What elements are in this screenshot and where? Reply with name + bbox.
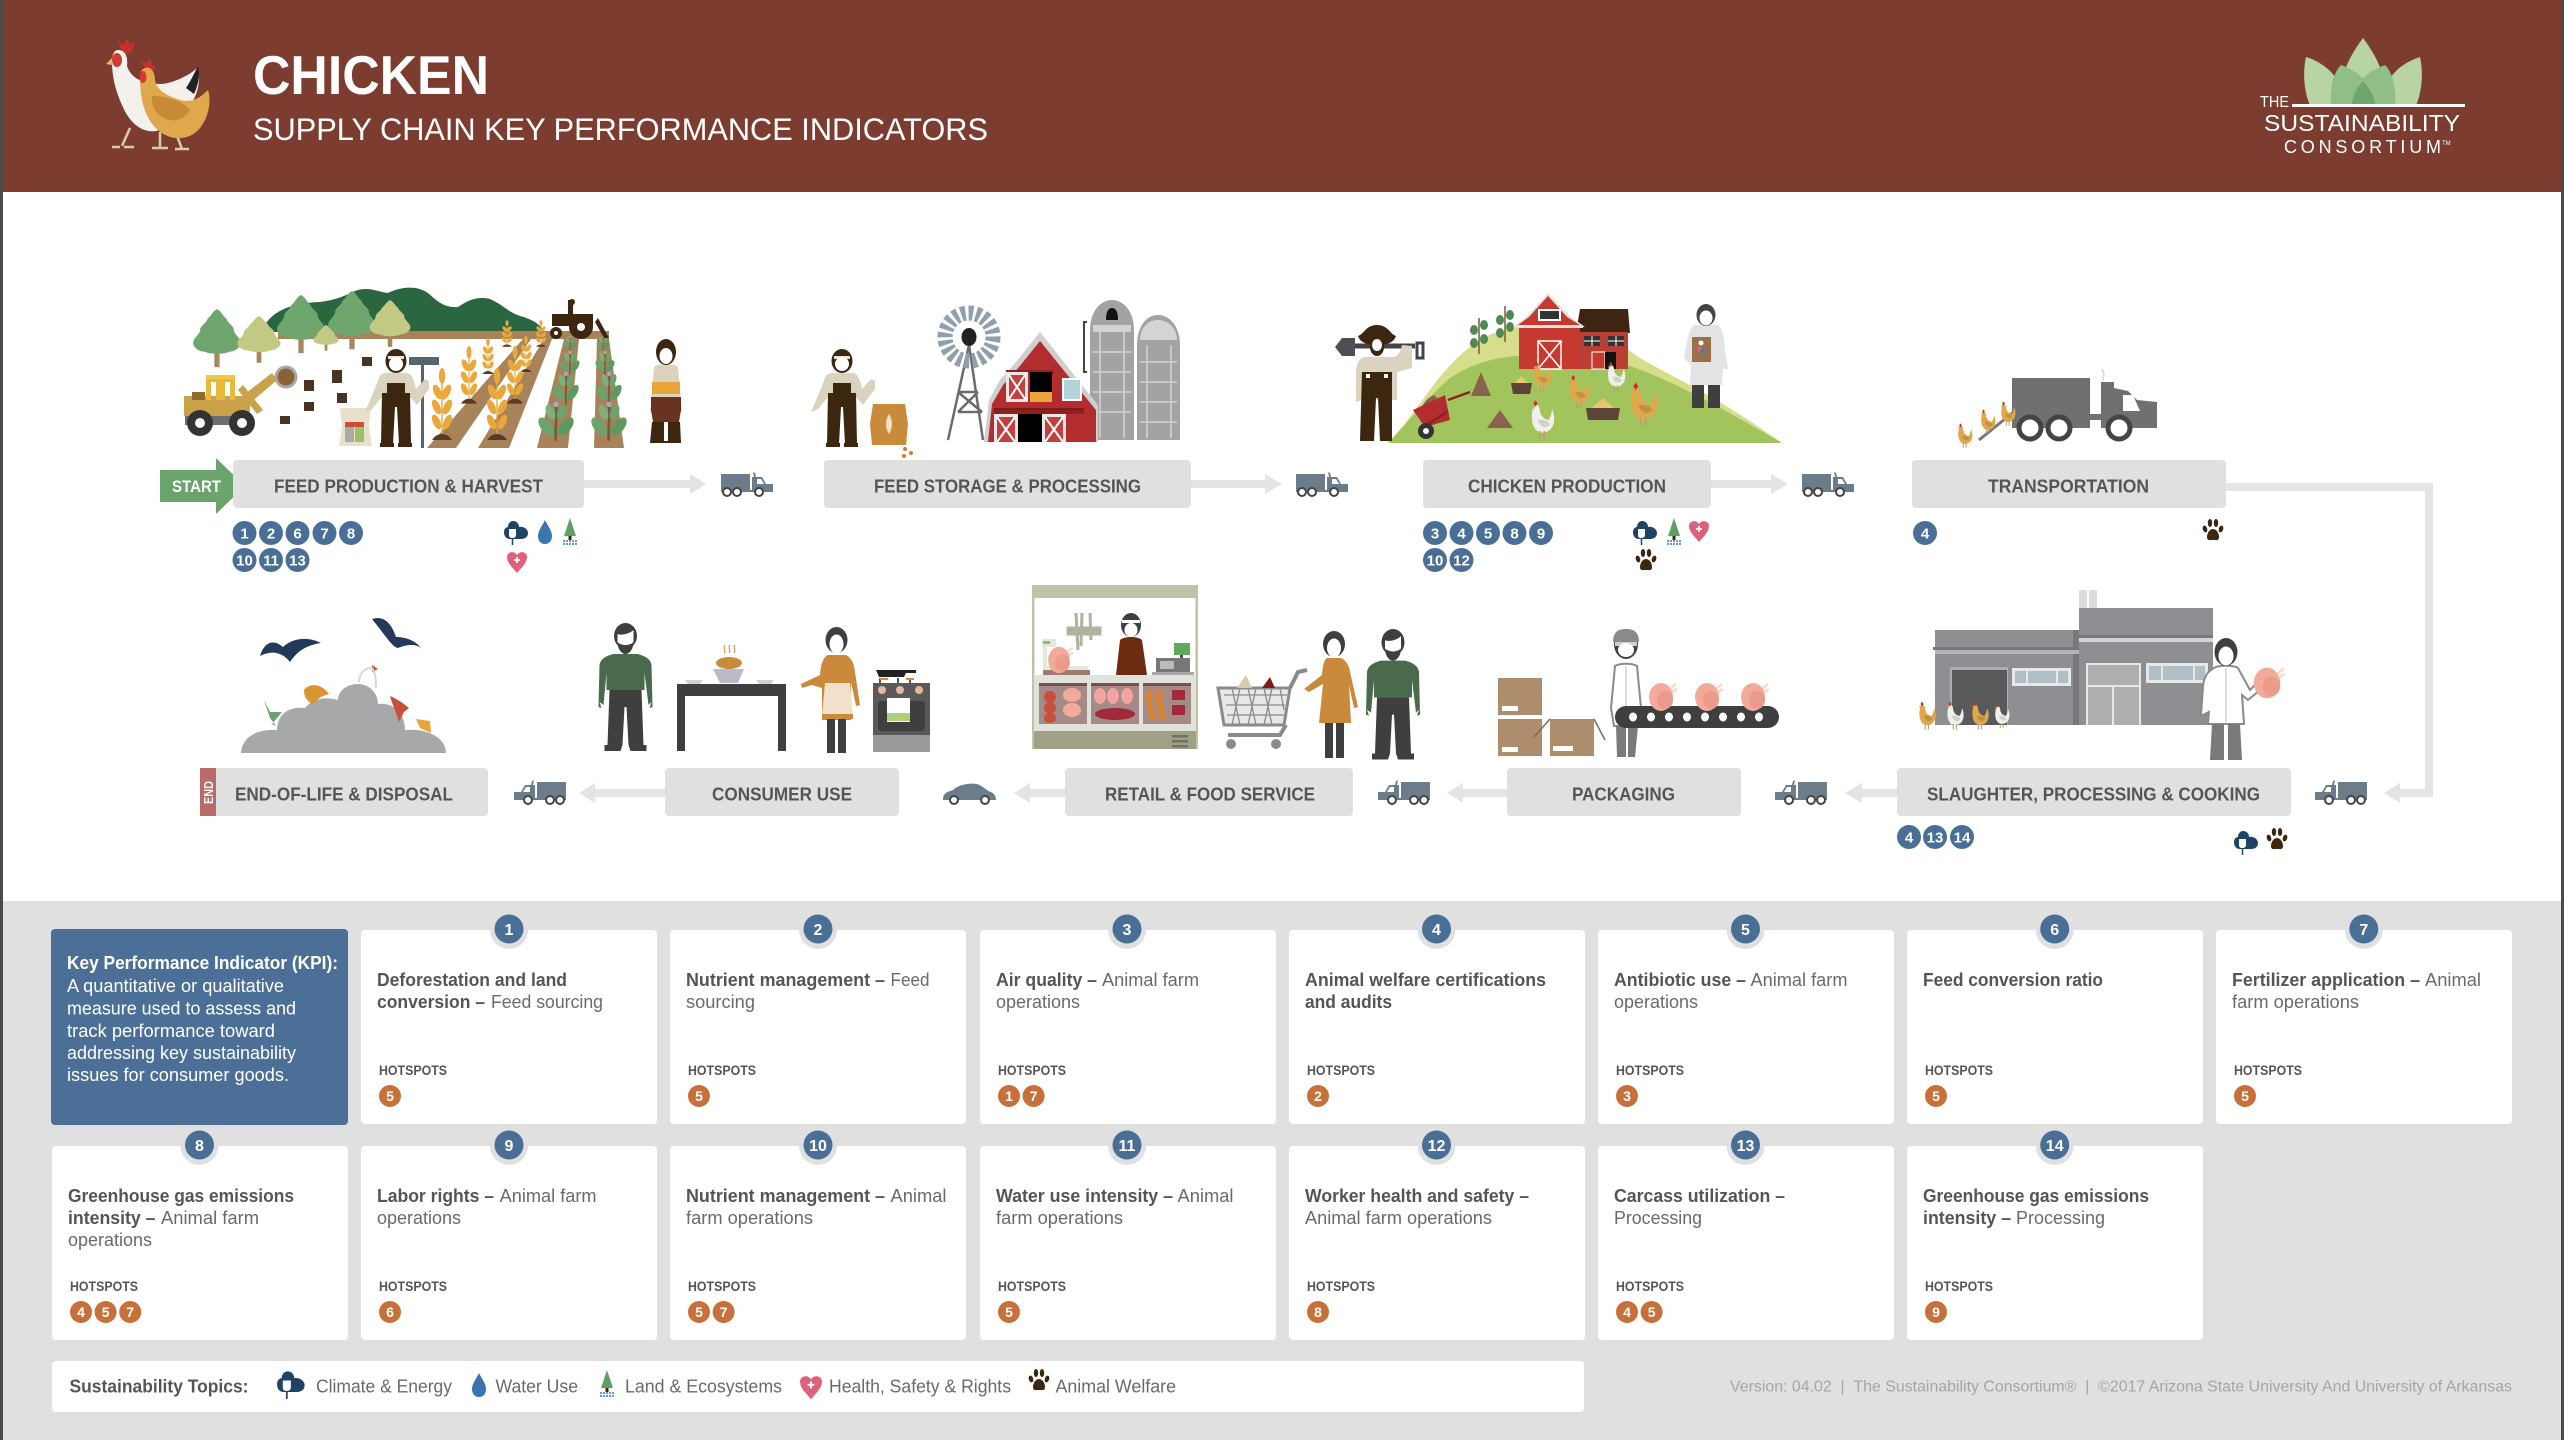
KPI card 5: Antibiotic use –: [1614, 970, 1746, 990]
KPI card 4: 2: [1314, 1088, 1322, 1104]
start arrow: START: [172, 477, 222, 496]
KPI card 13: HOTSPOTS: [1616, 1279, 1684, 1294]
KPI card 6: [1907, 911, 2203, 1124]
KPI badges and topics: slaughter: 4: [1905, 830, 1914, 846]
KPI card 10: 7: [720, 1304, 728, 1320]
KPI card 9: operations: [377, 1208, 461, 1228]
meat items: [1044, 688, 1185, 723]
KPI card 13: 5: [1648, 1304, 1656, 1320]
KPI card 12: Worker health and safety –: [1305, 1186, 1529, 1206]
stage: feed storage and processing: FEED STORAGE & PROCESSING: [874, 476, 1141, 496]
KPI card 14: Greenhouse gas emissions: [1923, 1186, 2149, 1206]
farmer with shovel: [1335, 325, 1423, 441]
birds: [260, 618, 421, 662]
KPI card 9: 9: [505, 1138, 514, 1155]
KPI card 10: 5: [695, 1304, 703, 1320]
KPI badges and topics: chicken production: 5: [1484, 526, 1492, 542]
icon: truck: [1378, 780, 1430, 804]
KPI card 2: [670, 911, 966, 1124]
KPI card 4: [1289, 911, 1585, 1124]
arrow: [1447, 783, 1507, 803]
table with chicken dish: [677, 645, 786, 751]
KPI badge and topic: transportation: 4: [1921, 526, 1930, 542]
KPI card 9: Labor rights –: [377, 1186, 494, 1206]
KPI card 8: 7: [126, 1304, 134, 1320]
KPI card 14: 14: [2046, 1138, 2064, 1155]
legend: sustainability topics: [52, 1361, 1584, 1412]
KPI badges and topics: feed production: 6: [293, 526, 302, 542]
KPI card 1: 1: [505, 922, 514, 939]
arrow: [1711, 474, 1788, 494]
KPI definition box: A quantitative or qualitative: [67, 976, 284, 996]
KPI card 8: Animal farm: [161, 1208, 259, 1228]
food waste: [264, 665, 431, 733]
farmer with rake: [365, 349, 439, 448]
KPI badges and topics: feed production: 2: [267, 526, 275, 542]
KPI card 3: Animal farm: [1102, 970, 1199, 990]
KPI badges and topics: slaughter: 13: [1927, 830, 1943, 846]
scene: end of life and disposal: [241, 618, 446, 753]
manure piles and feed troughs: [1421, 372, 1620, 428]
wheelbarrow: [1413, 392, 1470, 439]
farmer with feed bag: [811, 349, 913, 458]
KPI card 10: farm operations: [686, 1208, 813, 1228]
legend: sustainability topics: Health, Safety & Rights: [829, 1376, 1011, 1396]
KPI card 8: operations: [68, 1230, 152, 1250]
process flow row one: [160, 458, 2433, 803]
icon: truck: [1296, 472, 1348, 496]
KPI card 14: HOTSPOTS: [1925, 1279, 1993, 1294]
icon: truck: [514, 780, 566, 804]
small trees: [1470, 306, 1514, 354]
KPI card 13: [1598, 1127, 1894, 1340]
KPI card 13: Carcass utilization –: [1614, 1186, 1785, 1206]
stage: transportation: TRANSPORTATION: [1988, 476, 2149, 496]
KPI badges and topics: feed production: 7: [320, 526, 329, 542]
KPI card 7: 5: [2241, 1088, 2249, 1104]
KPI card 12: HOTSPOTS: [1307, 1279, 1375, 1294]
KPI card 6: HOTSPOTS: [1925, 1063, 1993, 1078]
KPI card 10: [670, 1127, 966, 1340]
KPI badges and topics: slaughter: [1897, 825, 2288, 855]
scene: feed production and harvest: [184, 288, 682, 448]
KPI card 9: 6: [386, 1304, 394, 1320]
KPI badges and topics: chicken production: 9: [1537, 526, 1545, 542]
KPI card 8: [52, 1127, 348, 1340]
process flow row two: [200, 768, 2367, 816]
silos: [1084, 300, 1180, 440]
scene: feed storage and processing: [811, 300, 1180, 458]
icon: truck: [1802, 472, 1854, 496]
man: [598, 623, 652, 751]
arrow: [579, 783, 665, 803]
KPI card 7: 7: [2359, 922, 2368, 939]
KPI card 3: [980, 911, 1276, 1124]
KPI badges and topics: slaughter: 14: [1954, 830, 1971, 846]
KPI card 2: 2: [814, 922, 823, 939]
KPI card 2: Feed: [890, 970, 930, 990]
KPI card 5: Animal farm: [1750, 970, 1848, 990]
KPI card 13: Processing: [1614, 1208, 1702, 1228]
KPI card 3: operations: [996, 992, 1080, 1012]
KPI definition box: measure used to assess and: [67, 998, 296, 1018]
KPI card 9: HOTSPOTS: [379, 1279, 447, 1294]
stage: chicken production: CHICKEN PRODUCTION: [1468, 476, 1666, 496]
KPI card 13: 4: [1623, 1304, 1631, 1320]
legend: sustainability topics: Sustainability Topics:: [70, 1376, 248, 1396]
KPI card 4: 4: [1432, 922, 1441, 939]
title: CHICKEN: [253, 44, 489, 106]
KPI card 8: 5: [102, 1304, 110, 1320]
scene: packaging: [1498, 629, 1779, 757]
KPI definition box: track performance toward: [67, 1021, 275, 1041]
veterinarian with clipboard: [1684, 304, 1728, 408]
KPI card 6: 6: [2050, 922, 2059, 939]
red barn: [984, 332, 1098, 442]
man shopper: [1366, 629, 1420, 760]
KPI card 10: HOTSPOTS: [688, 1279, 756, 1294]
KPI badges and topics: feed production: 10: [236, 552, 253, 570]
KPI card 12: 8: [1314, 1304, 1322, 1320]
KPI card 6: 5: [1932, 1088, 1940, 1104]
stove: [873, 670, 930, 752]
KPI badges and topics: feed production: 11: [263, 552, 279, 570]
arrow: [1191, 474, 1282, 494]
legend: sustainability topics: Land & Ecosystems: [625, 1376, 782, 1396]
arrow: [1845, 783, 1897, 803]
KPI card 1: Deforestation and land: [377, 970, 567, 990]
legend: sustainability topics: Climate & Energy: [316, 1376, 452, 1396]
cardboard boxes: [1498, 678, 1605, 756]
KPI card 2: HOTSPOTS: [688, 1063, 756, 1078]
arrow: [1014, 783, 1065, 803]
scene: retail and food service: [1032, 585, 1420, 760]
KPI card 1: 5: [386, 1088, 394, 1104]
KPI badges and topics: feed production: 13: [289, 552, 306, 570]
KPI card 11: Animal: [1178, 1186, 1234, 1206]
KPI card 7: Fertilizer application –: [2232, 970, 2420, 990]
scale with chicken: [1042, 639, 1090, 675]
windmill: [945, 313, 993, 440]
KPI card 2: Nutrient management –: [686, 970, 885, 990]
loading ramp and chickens: [1958, 401, 2016, 448]
logo: The Sustainability Consortium: TM: [2442, 141, 2451, 147]
logo: The Sustainability Consortium: CONSORTIUM: [2284, 137, 2441, 157]
stage: end of life and disposal: END-OF-LIFE & DISPOSAL: [235, 784, 453, 804]
KPI card 11: farm operations: [996, 1208, 1123, 1228]
landfill mound: [241, 684, 446, 753]
start arrow: [160, 458, 245, 514]
KPI card 8: HOTSPOTS: [70, 1279, 138, 1294]
cash register: [1152, 643, 1194, 675]
KPI badge and topic: transportation: [1913, 519, 2224, 545]
connector arrow to second row: [2226, 483, 2433, 803]
KPI badges and topics: feed production: 1: [240, 526, 249, 542]
fertilizer bag: [339, 408, 372, 446]
KPI card 14: 9: [1932, 1304, 1940, 1320]
barn: [1513, 293, 1630, 369]
tractor: [550, 299, 609, 339]
footer credit: Version: 04.02 | The Sustainability Consortium® | ©2017 Arizona State University And University of Arkansas: [1730, 1378, 2512, 1396]
chickens entering: [1919, 702, 2009, 730]
KPI card 6: Feed conversion ratio: [1923, 970, 2103, 990]
KPI card 3: 7: [1030, 1088, 1038, 1104]
KPI card 1: Feed sourcing: [491, 992, 603, 1012]
KPI card 8: intensity –: [68, 1208, 156, 1228]
KPI card 3: Air quality –: [996, 970, 1097, 990]
KPI card 9: [361, 1127, 657, 1340]
KPI card 4: Animal welfare certifications: [1305, 970, 1546, 990]
KPI card 5: [1598, 911, 1894, 1124]
KPI card 1: conversion –: [377, 992, 485, 1012]
stage: retail and food service: RETAIL & FOOD SERVICE: [1105, 784, 1315, 804]
knives: [1068, 613, 1100, 650]
header band: [0, 0, 2564, 192]
KPI card 7: Animal: [2425, 970, 2481, 990]
worker holding chicken: [2201, 638, 2285, 760]
stage: feed production and harvest: [233, 460, 584, 508]
KPI card 7: HOTSPOTS: [2234, 1063, 2302, 1078]
KPI badges and topics: chicken production: 12: [1453, 552, 1470, 570]
icon: truck: [2315, 780, 2367, 804]
KPI card 1: [361, 911, 657, 1124]
stage: end of life and disposal: END: [201, 781, 216, 804]
KPI definition box: issues for consumer goods.: [67, 1065, 289, 1085]
icon: two hens: [106, 38, 210, 149]
icon: truck: [721, 472, 773, 496]
stage: transportation: [1912, 460, 2226, 508]
KPI card 3: HOTSPOTS: [998, 1063, 1066, 1078]
scene: transportation: [1958, 369, 2157, 448]
KPI definition box: addressing key sustainability: [67, 1043, 296, 1063]
KPI card 5: HOTSPOTS: [1616, 1063, 1684, 1078]
KPI badges and topics: feed production: [232, 518, 577, 573]
tree stumps: [280, 357, 372, 424]
stage: slaughter, processing and cooking: [1897, 768, 2291, 816]
stage: chicken production: [1423, 460, 1711, 508]
KPI card 14: intensity –: [1923, 1208, 2011, 1228]
KPI card 4: HOTSPOTS: [1307, 1063, 1375, 1078]
subtitle: SUPPLY CHAIN KEY PERFORMANCE INDICATORS: [253, 111, 988, 147]
KPI badges and topics: feed production: 8: [347, 526, 355, 542]
KPI card 7: farm operations: [2232, 992, 2359, 1012]
KPI badges and topics: chicken production: 8: [1510, 526, 1519, 542]
lower grey panel: [0, 901, 2564, 1440]
hill: [1388, 326, 1782, 443]
packaging worker: [1611, 629, 1641, 757]
conveyor belt: [1615, 683, 1779, 728]
scene: consumer use: [598, 623, 930, 753]
logo: The Sustainability Consortium: [2260, 38, 2465, 157]
KPI badges and topics: chicken production: 4: [1457, 526, 1466, 542]
logo: The Sustainability Consortium: THE: [2260, 94, 2289, 111]
KPI card 5: 5: [1741, 922, 1750, 939]
woman in apron: [801, 627, 860, 753]
KPI card 11: 11: [1119, 1138, 1136, 1155]
KPI card 13: 13: [1737, 1138, 1754, 1155]
shopping cart: [1218, 670, 1307, 749]
butcher: [1116, 613, 1147, 675]
KPI definition box: [51, 929, 348, 1125]
KPI card 10: Nutrient management –: [686, 1186, 885, 1206]
butcher display case: [1032, 585, 1198, 749]
KPI card 1: HOTSPOTS: [379, 1063, 447, 1078]
legend: sustainability topics: Animal Welfare: [1056, 1376, 1176, 1396]
stage: slaughter, processing and cooking: SLAUGHTER, PROCESSING & COOKING: [1927, 784, 2260, 804]
truck: [2012, 369, 2157, 441]
arrow: [584, 474, 706, 494]
KPI card 3: 1: [1005, 1088, 1013, 1104]
stage: packaging: [1507, 768, 1741, 816]
stage: feed production and harvest: FEED PRODUCTION & HARVEST: [274, 476, 543, 496]
KPI card 12: Animal farm operations: [1305, 1208, 1492, 1228]
KPI card 11: HOTSPOTS: [998, 1279, 1066, 1294]
KPI card 8: 4: [77, 1304, 85, 1320]
KPI definition box: Key Performance Indicator (KPI):: [67, 953, 338, 973]
factory building: [1933, 590, 2213, 725]
KPI badges and topics: chicken production: [1423, 518, 1709, 572]
woman shopper: [1304, 631, 1358, 758]
KPI card 14: [1907, 1127, 2203, 1340]
KPI card 5: operations: [1614, 992, 1698, 1012]
stage: feed storage and processing: [824, 460, 1191, 508]
KPI card 8: 8: [195, 1138, 204, 1155]
KPI card 12: 12: [1428, 1138, 1446, 1155]
icon: car: [943, 784, 996, 804]
scene: slaughter and processing: [1919, 590, 2285, 760]
stage: retail and food service: [1065, 768, 1353, 816]
scene: chicken production: [1335, 293, 1782, 443]
stage: consumer use: [665, 768, 899, 816]
free range chickens: [1531, 362, 1657, 439]
KPI card 10: 10: [809, 1138, 827, 1155]
KPI badges and topics: chicken production: 3: [1431, 526, 1439, 542]
KPI card 12: [1289, 1127, 1585, 1340]
stage: packaging: PACKAGING: [1572, 784, 1675, 804]
KPI card 14: Processing: [2016, 1208, 2105, 1228]
stage: consumer use: CONSUMER USE: [712, 784, 852, 804]
logo: The Sustainability Consortium: SUSTAINABILITY: [2264, 110, 2460, 136]
KPI card 2: 5: [695, 1088, 703, 1104]
KPI card 11: 5: [1005, 1304, 1013, 1320]
KPI card 8: Greenhouse gas emissions: [68, 1186, 294, 1206]
KPI card 9: Animal farm: [500, 1186, 597, 1206]
KPI card 4: and audits: [1305, 992, 1392, 1012]
stage: end of life and disposal: [200, 768, 488, 816]
KPI card 11: [980, 1127, 1276, 1340]
KPI badges and topics: chicken production: 10: [1427, 552, 1443, 570]
legend: sustainability topics: Water Use: [496, 1376, 578, 1396]
KPI card 7: [2216, 911, 2512, 1124]
woman with grain basket: [650, 339, 682, 443]
loader: [184, 366, 298, 436]
KPI card 3: 3: [1123, 922, 1132, 939]
KPI card 10: Animal: [890, 1186, 946, 1206]
KPI card 5: 3: [1623, 1088, 1631, 1104]
icon: truck: [1775, 780, 1827, 804]
KPI card 11: Water use intensity –: [996, 1186, 1173, 1206]
KPI card 2: sourcing: [686, 992, 755, 1012]
